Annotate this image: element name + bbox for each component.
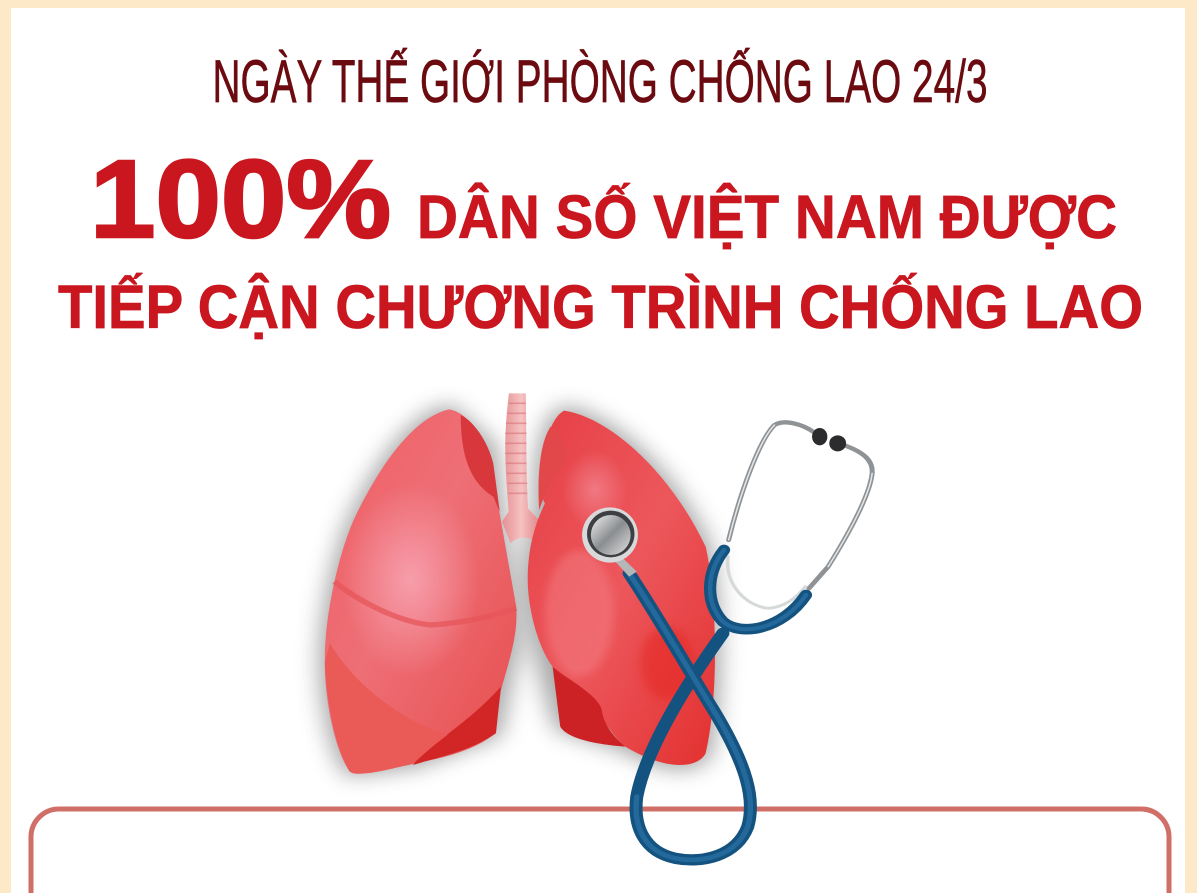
stethoscope blue tube [629,550,806,860]
lungs shadow [325,409,715,772]
right lung [528,411,715,765]
heading [58,138,1143,341]
stethoscope metal headset [728,422,872,608]
trachea [502,393,540,543]
info panel outline [31,809,1169,893]
stethoscope chest piece [582,507,638,577]
left lung [325,409,517,774]
illustration: lungs and stethoscope [325,393,872,860]
heading: line one: DÂN SỐ VIỆT NAM ĐƯỢC [417,183,1117,251]
stethoscope ear tips [812,428,846,451]
heading: 100 percent: 100% [90,138,391,261]
